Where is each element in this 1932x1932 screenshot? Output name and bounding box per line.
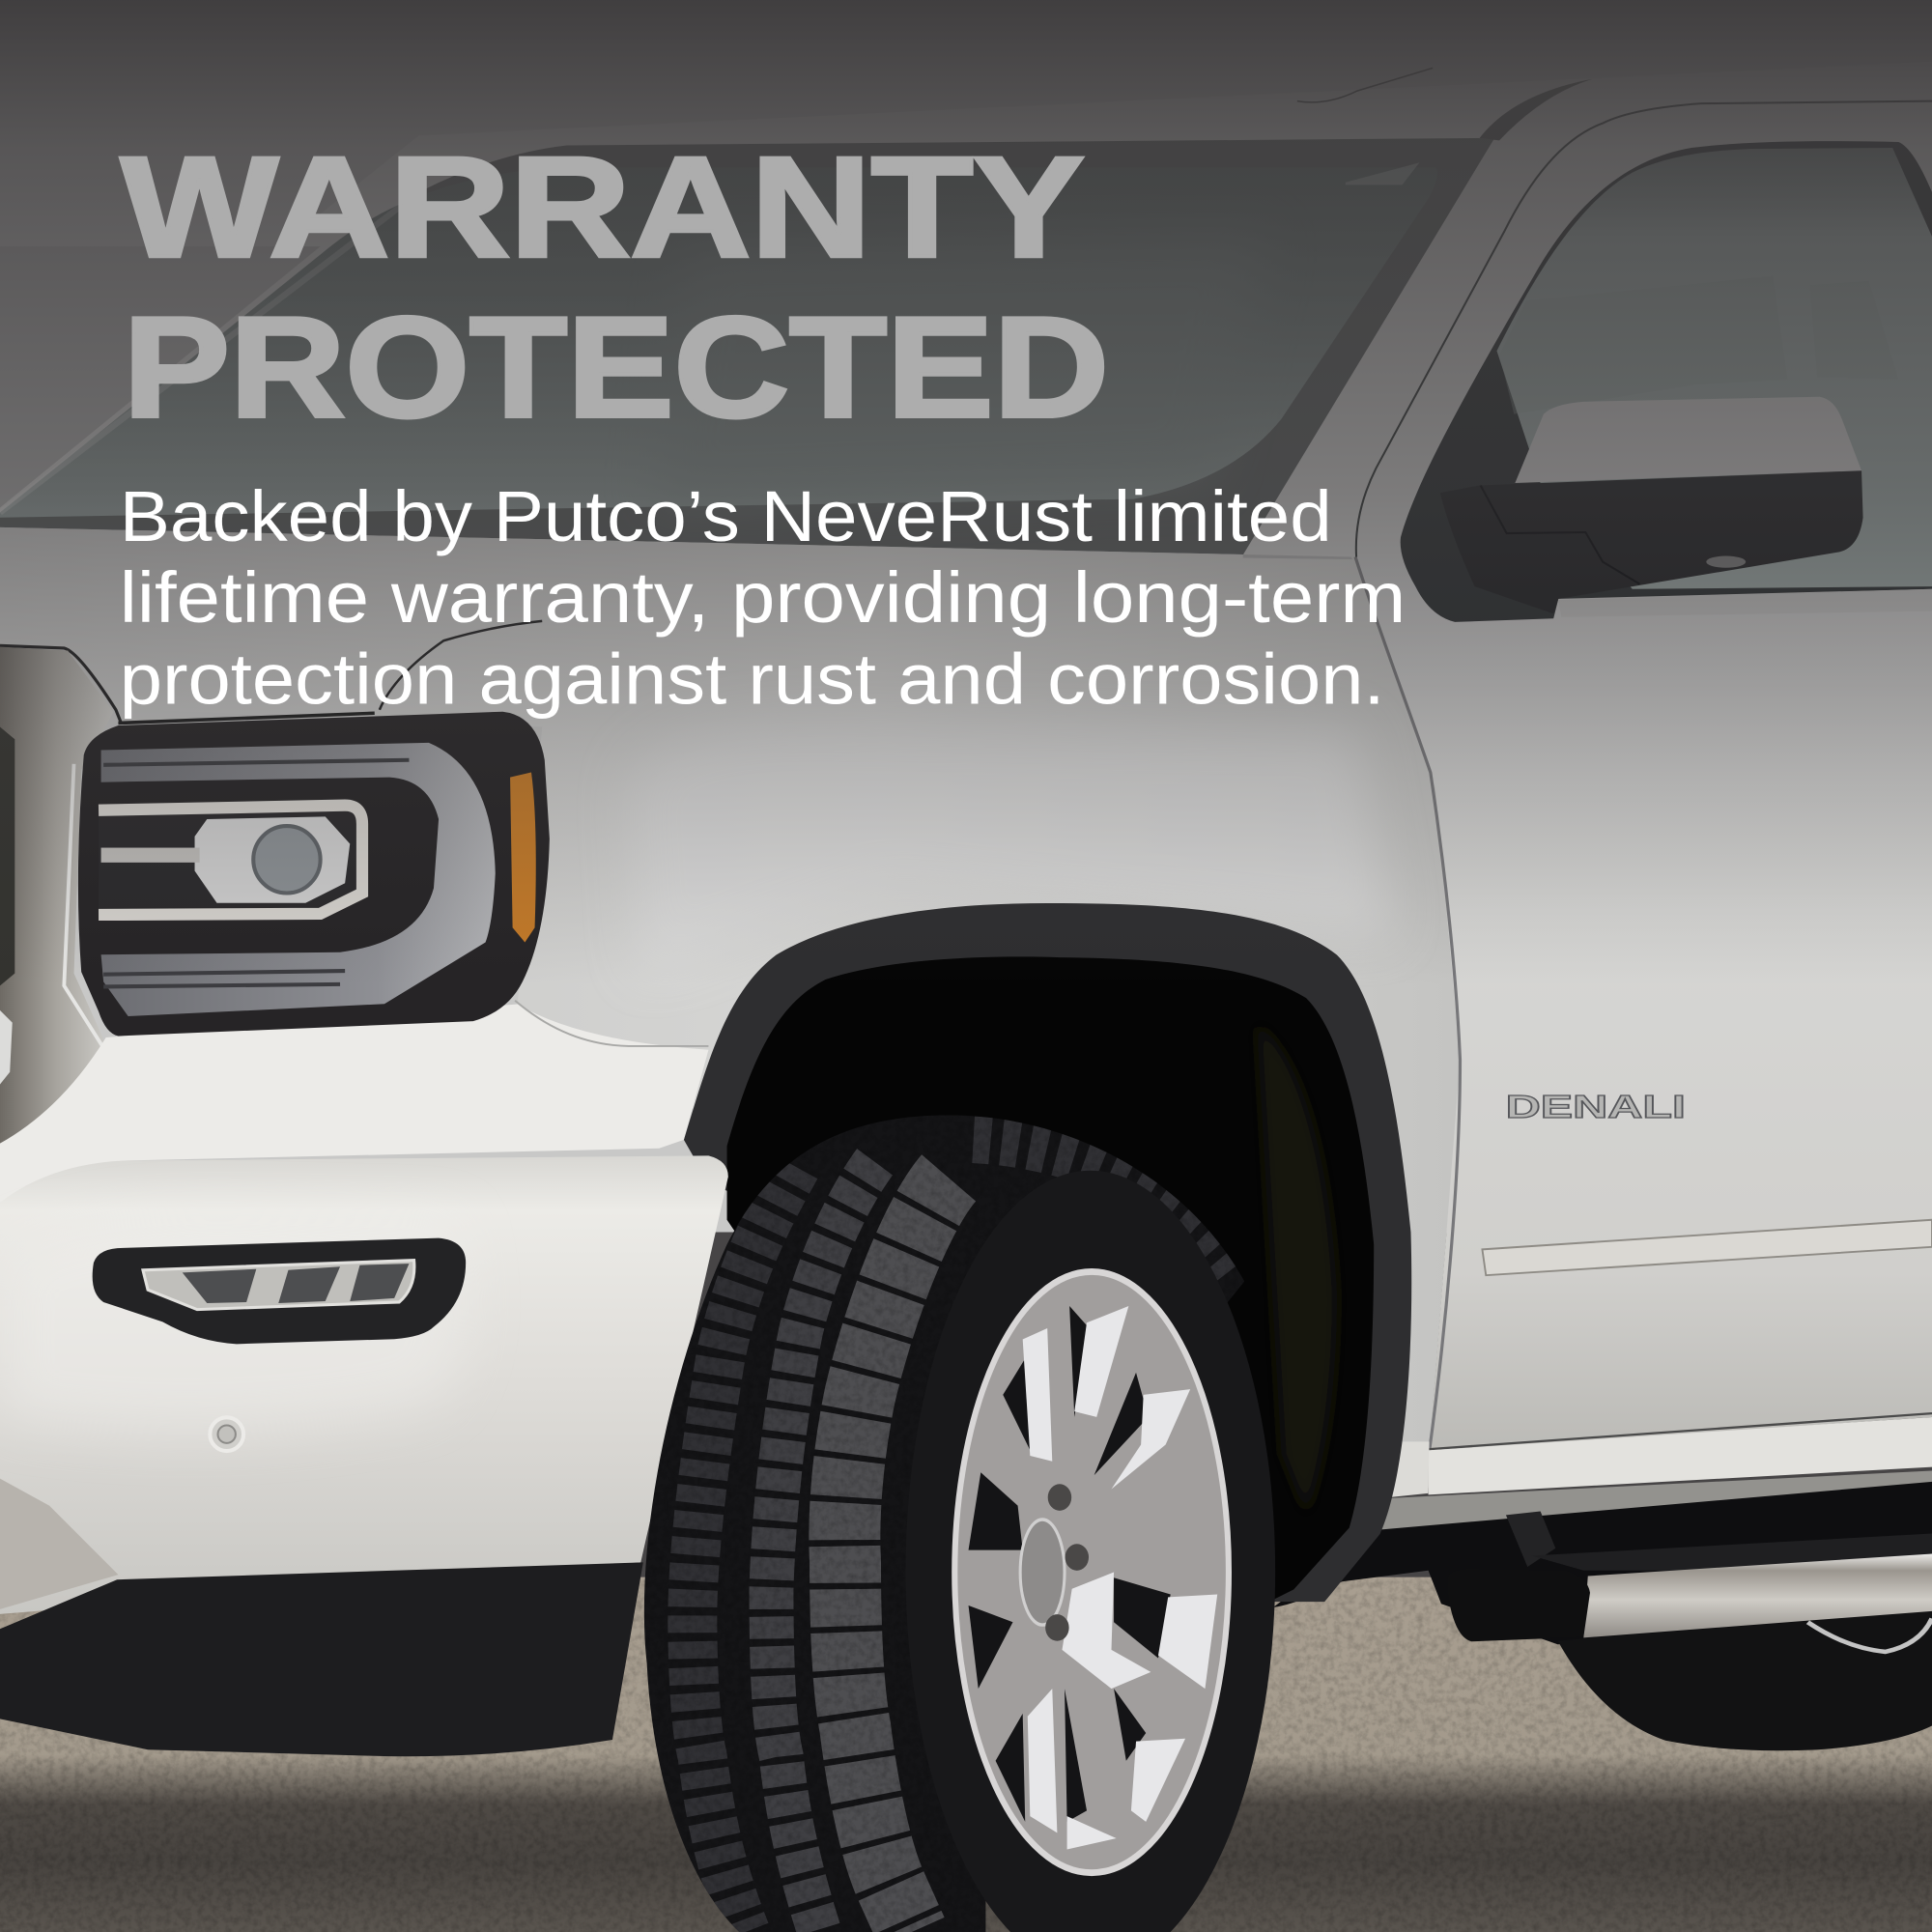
wheel openings — [969, 1306, 1171, 1822]
parking sensor — [210, 1417, 243, 1451]
windshield — [0, 138, 1494, 554]
center cap — [1020, 1520, 1065, 1625]
title — [121, 128, 1109, 447]
hood seam — [380, 621, 542, 710]
headlight — [78, 712, 550, 1036]
door bottom line — [1429, 1413, 1932, 1449]
light band stripes — [103, 760, 409, 986]
bumper shading — [0, 1213, 467, 1433]
projector lens — [253, 826, 321, 893]
fog light — [93, 1238, 466, 1344]
upper bumper band — [0, 1005, 708, 1203]
side mirror — [1440, 397, 1863, 613]
door molding — [1482, 1220, 1932, 1275]
window sill — [1558, 589, 1932, 617]
fender flank — [1380, 1441, 1430, 1498]
projector housing — [195, 816, 350, 903]
lower body and running board — [1273, 1413, 1932, 1750]
rocker panel — [1429, 1417, 1932, 1494]
fog lens — [143, 1261, 414, 1310]
tire sidewall — [906, 1171, 1275, 1932]
amber marker — [510, 772, 536, 943]
cowl strip — [1243, 554, 1352, 559]
step end cap — [1448, 1569, 1590, 1641]
badge: DENALI — [1506, 1090, 1686, 1125]
rain channel — [1480, 79, 1593, 140]
chrome lower trim — [0, 1479, 118, 1609]
daytime running light — [101, 743, 496, 1016]
door panel — [1355, 557, 1932, 1452]
rim face — [954, 1271, 1229, 1873]
hood left reflection — [0, 0, 1932, 469]
ground — [0, 1577, 1932, 1932]
hood and cab seams — [0, 621, 542, 722]
body line 1: Backed by Putco’s NeveRust limited — [120, 476, 1332, 556]
hood left lower — [0, 246, 321, 508]
title line 2: PROTECTED — [124, 288, 1109, 447]
fender line — [515, 1001, 708, 1046]
hood and fender — [0, 527, 1460, 1454]
roof line — [1297, 68, 1433, 102]
grille chrome — [0, 647, 113, 1149]
door outline — [1356, 101, 1932, 557]
rear tire — [1558, 1611, 1932, 1750]
lower bumper — [0, 1155, 728, 1614]
wheel well — [684, 903, 1411, 1602]
body text — [120, 476, 1406, 719]
side window — [1401, 141, 1932, 622]
bar detail — [101, 848, 200, 863]
underbody dark — [1273, 1478, 1932, 1644]
lug nuts — [1045, 1484, 1089, 1641]
front tire tread — [643, 1115, 1244, 1932]
body line 3: protection against rust and corrosion. — [120, 639, 1385, 719]
cab side details — [1243, 68, 1932, 622]
grille cap seam — [0, 645, 121, 722]
step bracket — [1506, 1512, 1555, 1567]
title line 1: WARRANTY — [121, 128, 1084, 287]
chrome wheel — [954, 1271, 1229, 1873]
chrome highlights — [1023, 1306, 1217, 1850]
underside sheen — [1378, 1470, 1932, 1530]
inner chrome frame — [99, 806, 362, 915]
lower air dam — [0, 1562, 643, 1756]
headlight seam — [118, 713, 375, 723]
chrome step — [1583, 1554, 1932, 1637]
door seam — [1355, 557, 1460, 1452]
upper body base — [0, 0, 1932, 1233]
body line 2: lifetime warranty, providing long-term — [120, 557, 1406, 638]
step pad — [1532, 1534, 1932, 1571]
